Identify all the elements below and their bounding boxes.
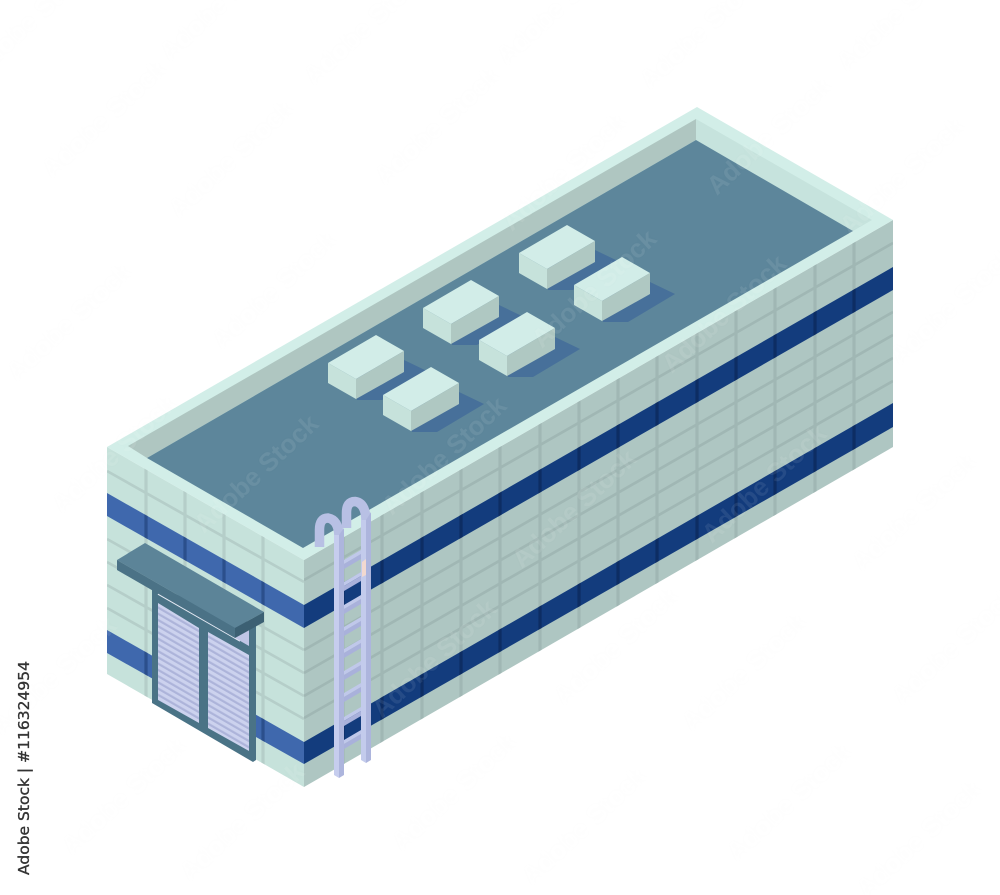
watermark pattern: Adobe Stock — [1, 256, 138, 387]
watermark pattern: Adobe Stock — [701, 70, 838, 201]
watermark pattern: Adobe Stock — [656, 248, 793, 379]
watermark pattern: Adobe Stock — [721, 736, 858, 867]
rooftop unit 2 — [574, 257, 675, 322]
watermark pattern: Adobe Stock — [676, 606, 813, 737]
watermark pattern: Adobe Stock — [516, 760, 653, 891]
rooftop unit 6 — [383, 367, 484, 432]
watermark pattern: Adobe Stock — [846, 446, 983, 577]
watermark pattern: Adobe Stock — [696, 418, 833, 549]
right shutter panel — [208, 632, 249, 751]
door awning — [117, 543, 264, 638]
ladder rear hook and rail — [346, 502, 371, 763]
watermark pattern: Adobe Stock — [188, 408, 325, 539]
watermark pattern: Adobe Stock — [163, 93, 300, 224]
roof inner wall back-right — [696, 119, 872, 231]
stock id caption: Adobe Stock | #116324954 — [15, 661, 33, 875]
building — [107, 107, 893, 800]
roof rim — [107, 107, 893, 560]
watermark pattern: Adobe Stock — [386, 726, 523, 857]
watermark pattern: Adobe Stock — [206, 224, 343, 355]
watermark pattern: Adobe Stock — [56, 730, 193, 861]
watermark pattern: Adobe Stock — [526, 223, 663, 354]
ladder — [320, 502, 371, 778]
watermark pattern: Adobe Stock — [506, 443, 643, 574]
rooftop unit 5 — [328, 335, 429, 400]
pink chip on rail — [362, 559, 366, 577]
roof inner wall back-left — [128, 119, 696, 458]
ladder rungs — [344, 550, 361, 749]
rooftop unit 4 — [479, 312, 580, 377]
watermark pattern: Adobe Stock — [366, 593, 503, 724]
watermark pattern: Adobe Stock — [369, 60, 506, 191]
door frame — [152, 585, 256, 762]
watermark pattern: Adobe Stock — [496, 106, 633, 237]
ladder front hook and rail — [320, 518, 344, 778]
watermark pattern: Adobe Stock — [174, 756, 311, 887]
door transom glass — [235, 628, 249, 646]
right wall — [304, 220, 893, 800]
rooftop unit 3 — [423, 280, 524, 345]
watermark pattern: Adobe Stock — [376, 390, 513, 521]
right wall blue stripes — [304, 267, 893, 764]
entrance door — [152, 585, 256, 762]
rooftop unit 1 — [519, 225, 620, 290]
left wall blue stripes — [107, 493, 304, 764]
left shutter panel — [158, 603, 199, 723]
watermark pattern: Adobe Stock — [36, 53, 173, 184]
watermark pattern: Adobe Stock — [834, 110, 971, 241]
left wall — [107, 440, 304, 800]
watermark pattern: Adobe Stock — [548, 580, 685, 711]
door transom line — [158, 594, 240, 641]
watermark pattern: Adobe Stock — [46, 388, 183, 519]
rooftop units — [328, 225, 675, 432]
roof surface — [147, 140, 853, 548]
